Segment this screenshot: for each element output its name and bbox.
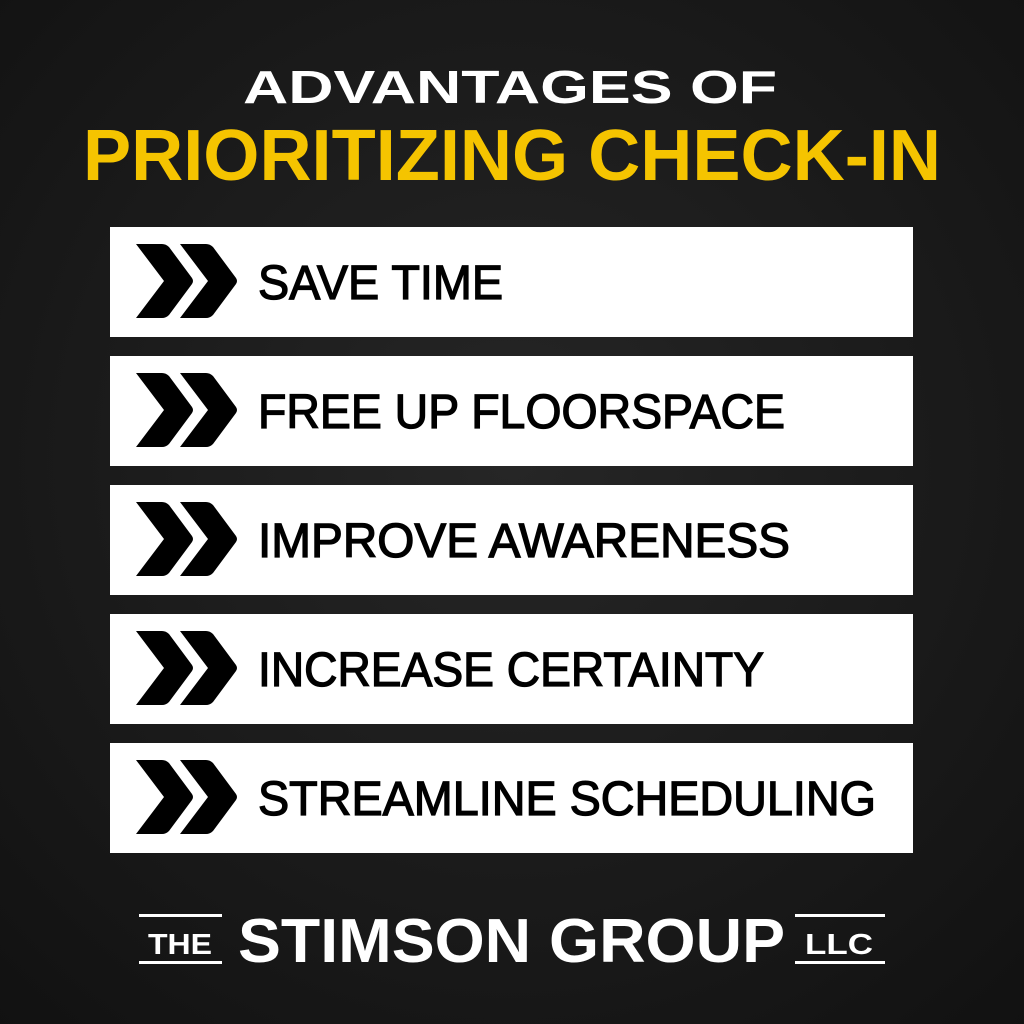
panel: save time: SAVE TIME [258, 257, 503, 310]
panel: streamline scheduling: STREAMLINE SCHEDULING [258, 773, 876, 826]
panel: free up floorspace [110, 356, 913, 466]
logo: THE [148, 929, 212, 961]
panel: free up floorspace: FREE UP FLOORSPACE [258, 386, 785, 439]
panel: save time [110, 227, 913, 337]
title [83, 61, 941, 196]
icon: chevrons [136, 631, 237, 705]
panel: streamline scheduling [110, 743, 913, 853]
panel: improve awareness: IMPROVE AWARENESS [258, 515, 790, 568]
panel: increase certainty: INCREASE CERTAINTY [258, 644, 764, 697]
logo: STIMSON GROUP [238, 907, 785, 976]
icon: chevrons [136, 760, 237, 834]
title: ADVANTAGES OF [243, 61, 777, 113]
logo: LLC [805, 929, 873, 961]
panel: increase certainty [110, 614, 913, 724]
icon: chevrons [136, 373, 237, 447]
icon: chevrons [136, 502, 237, 576]
icon: chevrons [136, 244, 237, 318]
panel: improve awareness [110, 485, 913, 595]
title: PRIORITIZING CHECK-IN [83, 116, 941, 196]
